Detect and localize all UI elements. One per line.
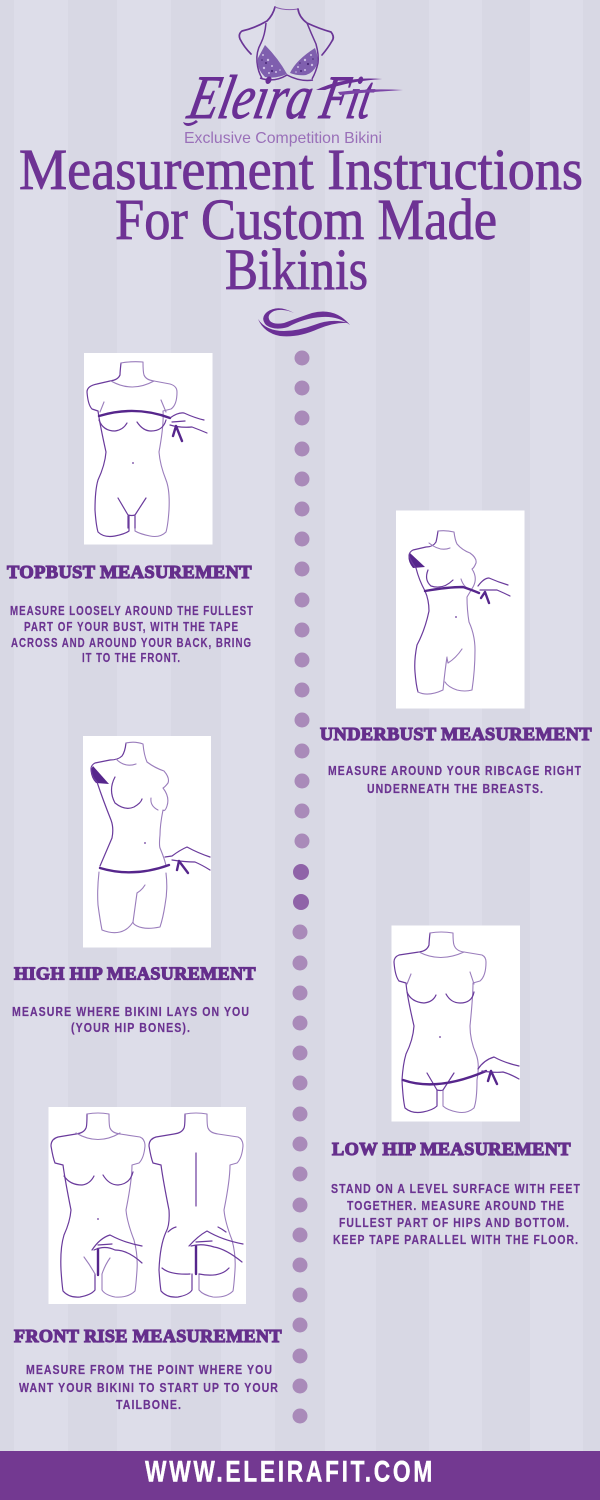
topbust text xyxy=(10,603,254,665)
low hip heading: LOW HIP MEASUREMENT xyxy=(332,1139,571,1159)
logo: Eleira Fit xyxy=(182,7,403,147)
high hip illustration xyxy=(83,736,211,948)
low hip text xyxy=(331,1181,581,1247)
title: For Custom Made xyxy=(115,187,497,252)
front rise illustration xyxy=(48,1107,246,1304)
timeline dots xyxy=(292,350,310,1424)
panel: topbust xyxy=(7,353,254,665)
front rise text xyxy=(19,1362,279,1412)
underbust heading: UNDERBUST MEASUREMENT xyxy=(320,724,592,744)
back figure xyxy=(149,1113,243,1297)
topbust text: ACROSS AND AROUND YOUR BACK, BRING xyxy=(11,635,252,650)
front rise text: MEASURE FROM THE POINT WHERE YOU xyxy=(26,1362,273,1377)
topbust text: MEASURE LOOSELY AROUND THE FULLEST xyxy=(10,603,254,618)
high hip text xyxy=(12,1004,250,1035)
underbust text xyxy=(328,763,582,796)
topbust text: IT TO THE FRONT. xyxy=(82,650,181,665)
front figure xyxy=(51,1113,145,1297)
panel: front rise xyxy=(14,1107,282,1412)
front rise heading: FRONT RISE MEASUREMENT xyxy=(14,1326,282,1346)
underbust illustration xyxy=(396,510,524,708)
topbust heading: TOPBUST MEASUREMENT xyxy=(7,562,252,582)
front rise text: WANT YOUR BIKINI TO START UP TO YOUR xyxy=(19,1380,279,1395)
logo wordmark: Eleira xyxy=(182,63,320,132)
high hip text: (YOUR HIP BONES). xyxy=(71,1020,191,1035)
footer bar xyxy=(0,1451,600,1500)
topbust text: PART OF YOUR BUST, WITH THE TAPE xyxy=(24,619,239,634)
panel: high hip xyxy=(12,736,256,1035)
high hip heading: HIGH HIP MEASUREMENT xyxy=(14,964,256,984)
panel: low hip xyxy=(331,926,581,1247)
logo tagline: Exclusive Competition Bikini xyxy=(184,130,382,147)
high hip text: MEASURE WHERE BIKINI LAYS ON YOU xyxy=(12,1004,250,1019)
logo wordmark: Fit xyxy=(314,63,381,132)
title xyxy=(19,137,583,302)
low hip illustration xyxy=(392,926,520,1122)
website address: WWW.ELEIRAFIT.COM xyxy=(145,1456,435,1488)
front rise text: TAILBONE. xyxy=(116,1397,182,1412)
topbust illustration xyxy=(84,353,212,544)
panel: underbust xyxy=(320,510,592,796)
title: Bikinis xyxy=(225,237,368,302)
underbust text: UNDERNEATH THE BREASTS. xyxy=(367,781,544,796)
icon: decorative swash xyxy=(258,308,350,336)
logo icon: bust outline with bikini xyxy=(239,7,333,80)
